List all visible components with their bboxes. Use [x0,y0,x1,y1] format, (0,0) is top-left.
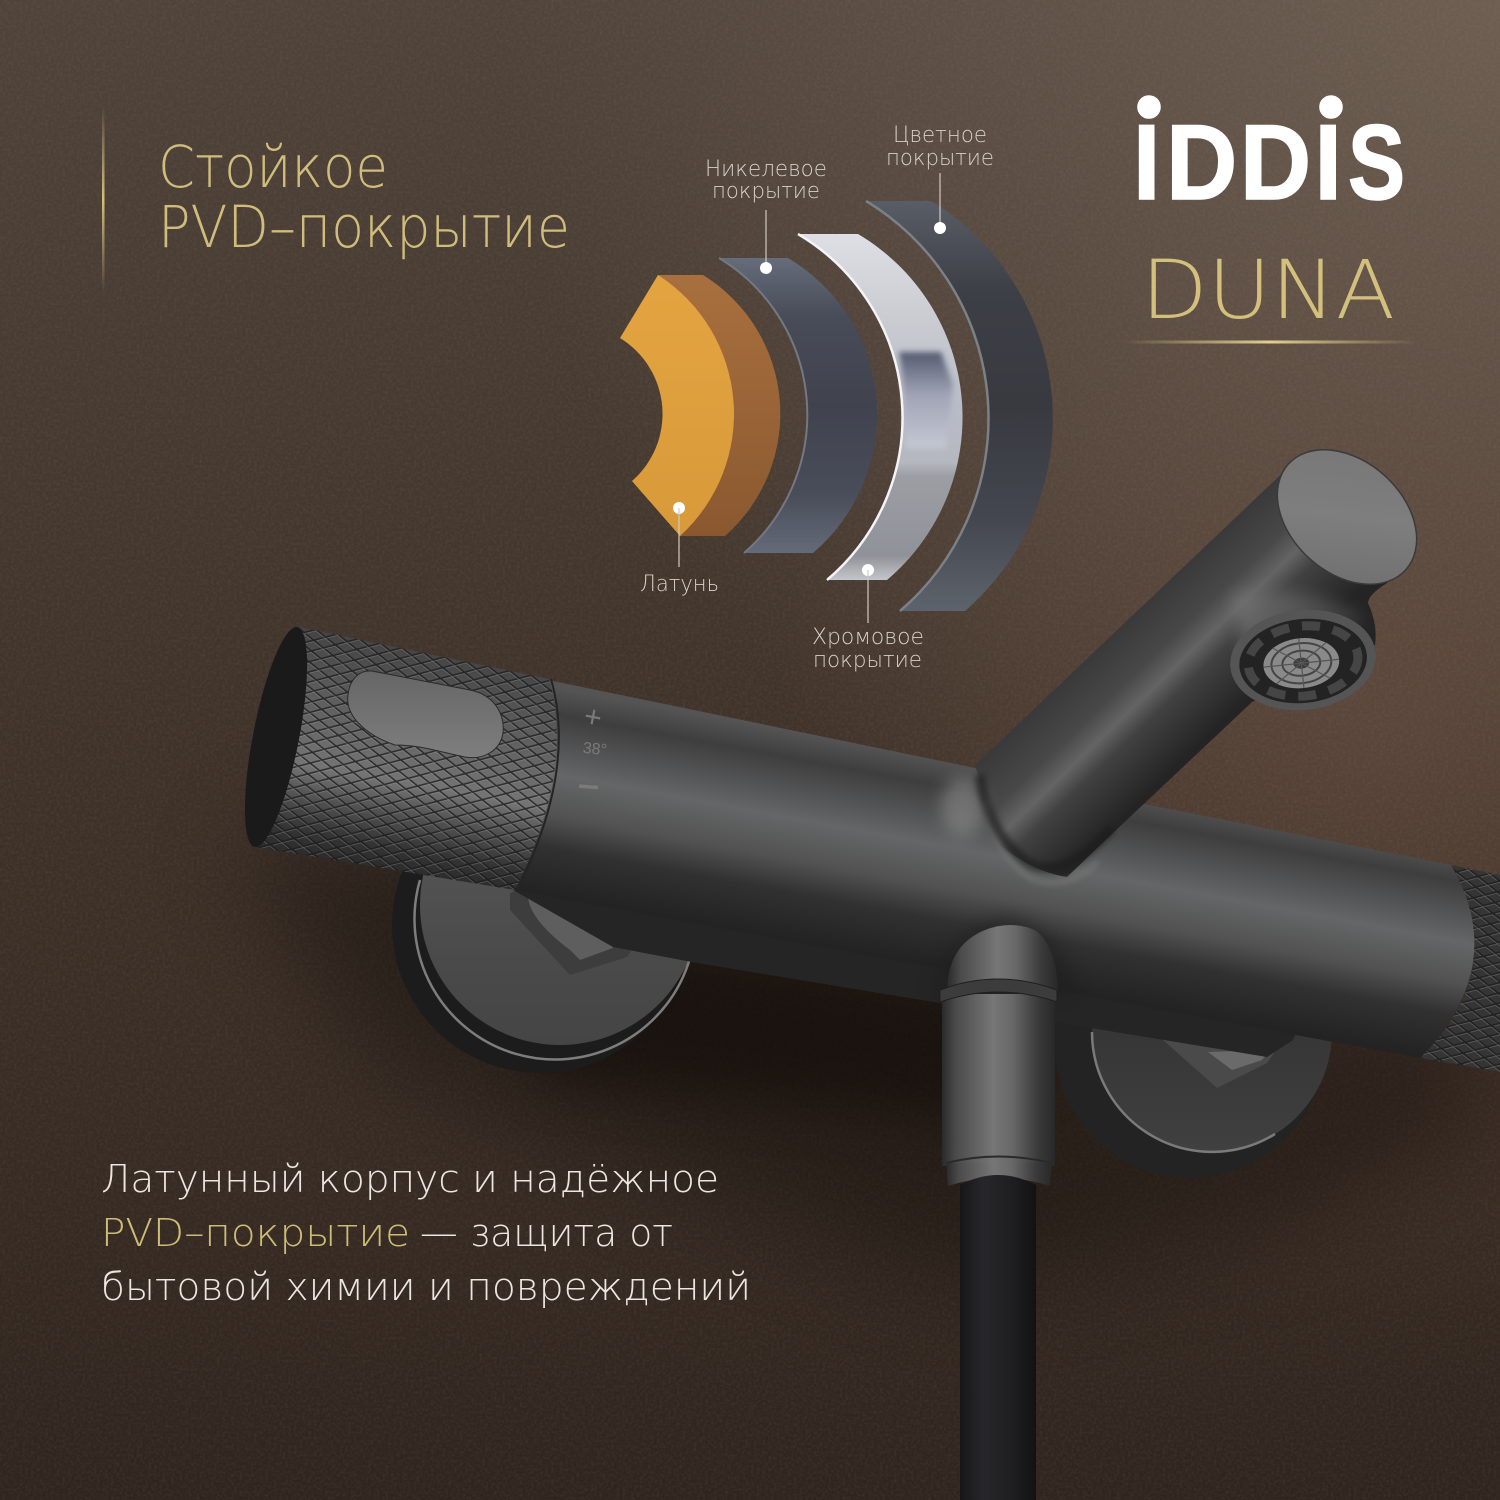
right knurled handle [1420,865,1500,1072]
brand logo: S [1348,102,1405,222]
spout end cap [1251,423,1443,611]
label: brass: Латунь [640,572,719,597]
main body [513,680,1474,1058]
junction fold light [985,800,1098,883]
body text: — защита от [420,1211,673,1255]
body text: бытовой химии и повреждений [101,1265,751,1309]
label: chrome coating: Хромовое [812,625,924,650]
label: colour coating [886,123,994,234]
aerator [1225,603,1381,717]
faucet illustration [230,423,1500,1500]
outlet elbow and pipe [930,915,1078,1186]
body text: PVD–покрытие [101,1211,410,1255]
junction fold shadow [980,775,1112,868]
collection name: DUNA [1141,244,1395,338]
label: nickel coating: Никелевое [705,157,827,182]
shower hose [960,1175,1036,1500]
left knurled handle [232,623,559,890]
label: nickel coating: покрытие [712,179,820,204]
temperature scale marks [579,700,608,789]
panel: coating layers diagram [620,201,1053,611]
body text: Латунный корпус и надёжное [101,1157,719,1201]
heading: Стойкое [158,133,388,201]
collection underline [1122,340,1418,344]
label: chrome coating: покрытие [813,648,922,673]
accent line beside heading [102,105,104,293]
label: colour coating: покрытие [886,146,994,171]
hex nut [510,885,645,975]
junction highlight [941,777,985,837]
label: brass [640,502,719,597]
neck highlight [1232,590,1362,655]
right wall flange [1055,908,1332,1178]
wall shadow [230,830,1500,1280]
label: chrome coating [812,564,924,673]
spout [941,423,1443,883]
label: colour coating: Цветное [893,123,987,148]
layer: brass [620,275,780,536]
brand logo: IDDI [1133,102,1342,222]
label: nickel coating [705,157,827,274]
temperature scale marks: + [581,700,605,735]
left wall flange [392,765,700,1073]
heading [158,133,570,261]
body text [101,1157,751,1309]
layer: colour coating [866,201,1053,611]
layer: nickel coating [719,258,877,553]
handle button [348,671,503,758]
handle end face [232,623,320,851]
layer: chrome coating [798,234,963,580]
heading: PVD–покрытие [158,193,570,261]
temperature scale marks: 38° [582,740,608,759]
mounting bar [513,890,1300,1057]
